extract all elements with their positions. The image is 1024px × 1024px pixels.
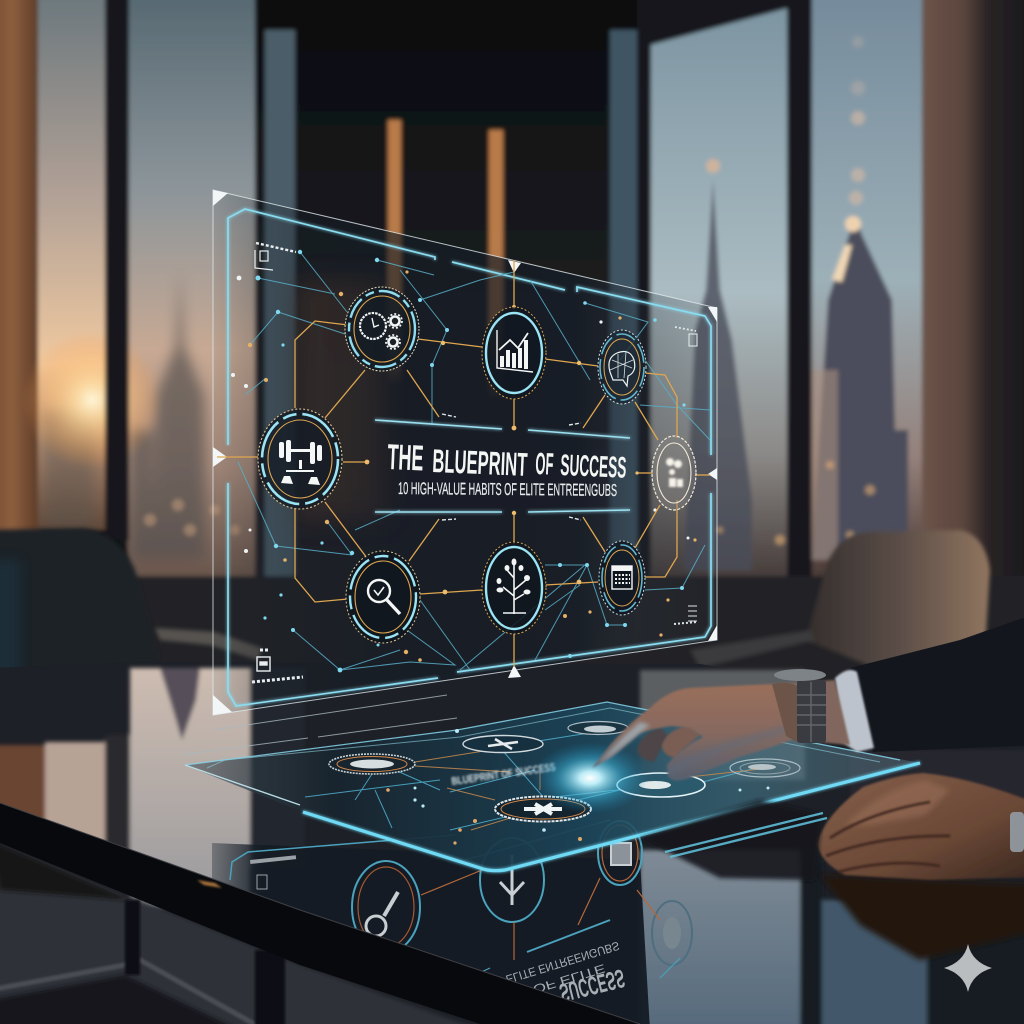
panel outer edge bbox=[213, 190, 717, 715]
node: time and gears bbox=[345, 287, 419, 371]
table node: far right bbox=[730, 759, 800, 777]
table node: left bbox=[329, 754, 415, 774]
mirrored reflected text: SUCCESS bbox=[557, 963, 628, 1008]
table node: right bbox=[617, 773, 705, 797]
mirrored reflected text: OF ELITE bbox=[531, 961, 607, 997]
corner data glyph: bottom right bbox=[674, 606, 697, 624]
chairs bbox=[0, 528, 990, 745]
table panel blurred heading: BLUEPRINT OF SUCCESS bbox=[451, 761, 556, 788]
corner data glyph: top left bbox=[255, 243, 296, 270]
dark device reflection bbox=[640, 800, 822, 880]
title: THE bbox=[387, 436, 424, 479]
table reflection of the panel bbox=[212, 820, 692, 1024]
corner and edge triangles bbox=[213, 190, 717, 715]
title bbox=[387, 436, 627, 485]
node: barbell and team structure bbox=[258, 409, 342, 509]
amber circuit lines bbox=[217, 260, 710, 667]
node: brain bbox=[598, 330, 646, 404]
subtitle: 10 HIGH-VALUE HABITS OF ELITE ENTREENGUBS bbox=[398, 479, 617, 500]
circuit junction dots bbox=[365, 305, 639, 594]
table node: top centre bbox=[463, 736, 543, 752]
lower hand bbox=[640, 773, 1024, 960]
mirrored reflected text: ELITE ENTREENGUBS bbox=[504, 939, 621, 987]
network dots bbox=[256, 250, 686, 672]
node: magnifier bbox=[346, 551, 420, 643]
title: OF bbox=[535, 446, 554, 482]
reflected tree ring bbox=[480, 838, 544, 922]
wristwatch bbox=[772, 669, 826, 743]
mirrored reflected text bbox=[504, 939, 628, 1008]
table node: top right bbox=[568, 722, 628, 734]
node: calendar bbox=[599, 541, 645, 615]
back fingers bbox=[637, 728, 668, 762]
corner data glyph: bottom left bbox=[252, 650, 303, 682]
reflected right ring bbox=[652, 901, 692, 965]
node: people cluster bbox=[652, 436, 696, 510]
table node: front bbox=[495, 796, 591, 822]
upper hand with suit sleeve and watch bbox=[592, 612, 1024, 781]
main holographic blueprint panel: SUCCESS bbox=[560, 449, 627, 485]
watermark sparkle bbox=[944, 944, 992, 992]
amber dots bbox=[248, 270, 697, 662]
small dash markers bbox=[442, 414, 581, 520]
glass table bbox=[0, 662, 1024, 1024]
node: tree bbox=[482, 542, 546, 634]
cyan network lines bbox=[238, 252, 710, 670]
title: BLUEPRINT bbox=[432, 442, 528, 483]
title dividers bbox=[375, 420, 630, 512]
main holographic blueprint panel bbox=[213, 190, 717, 715]
white dots bbox=[231, 276, 690, 553]
reflected magnifier ring bbox=[352, 861, 420, 953]
panel inner frame bbox=[228, 209, 711, 706]
holographic table panel bbox=[180, 695, 920, 873]
node: growth chart bbox=[482, 307, 546, 399]
background: boardroom with windows bbox=[0, 0, 1024, 720]
panel glass bbox=[213, 190, 717, 715]
tap glow bbox=[532, 742, 648, 814]
reflected calendar ring bbox=[598, 821, 642, 885]
corner data glyph: top right bbox=[675, 327, 697, 346]
table front edge and floor bbox=[0, 803, 640, 1024]
